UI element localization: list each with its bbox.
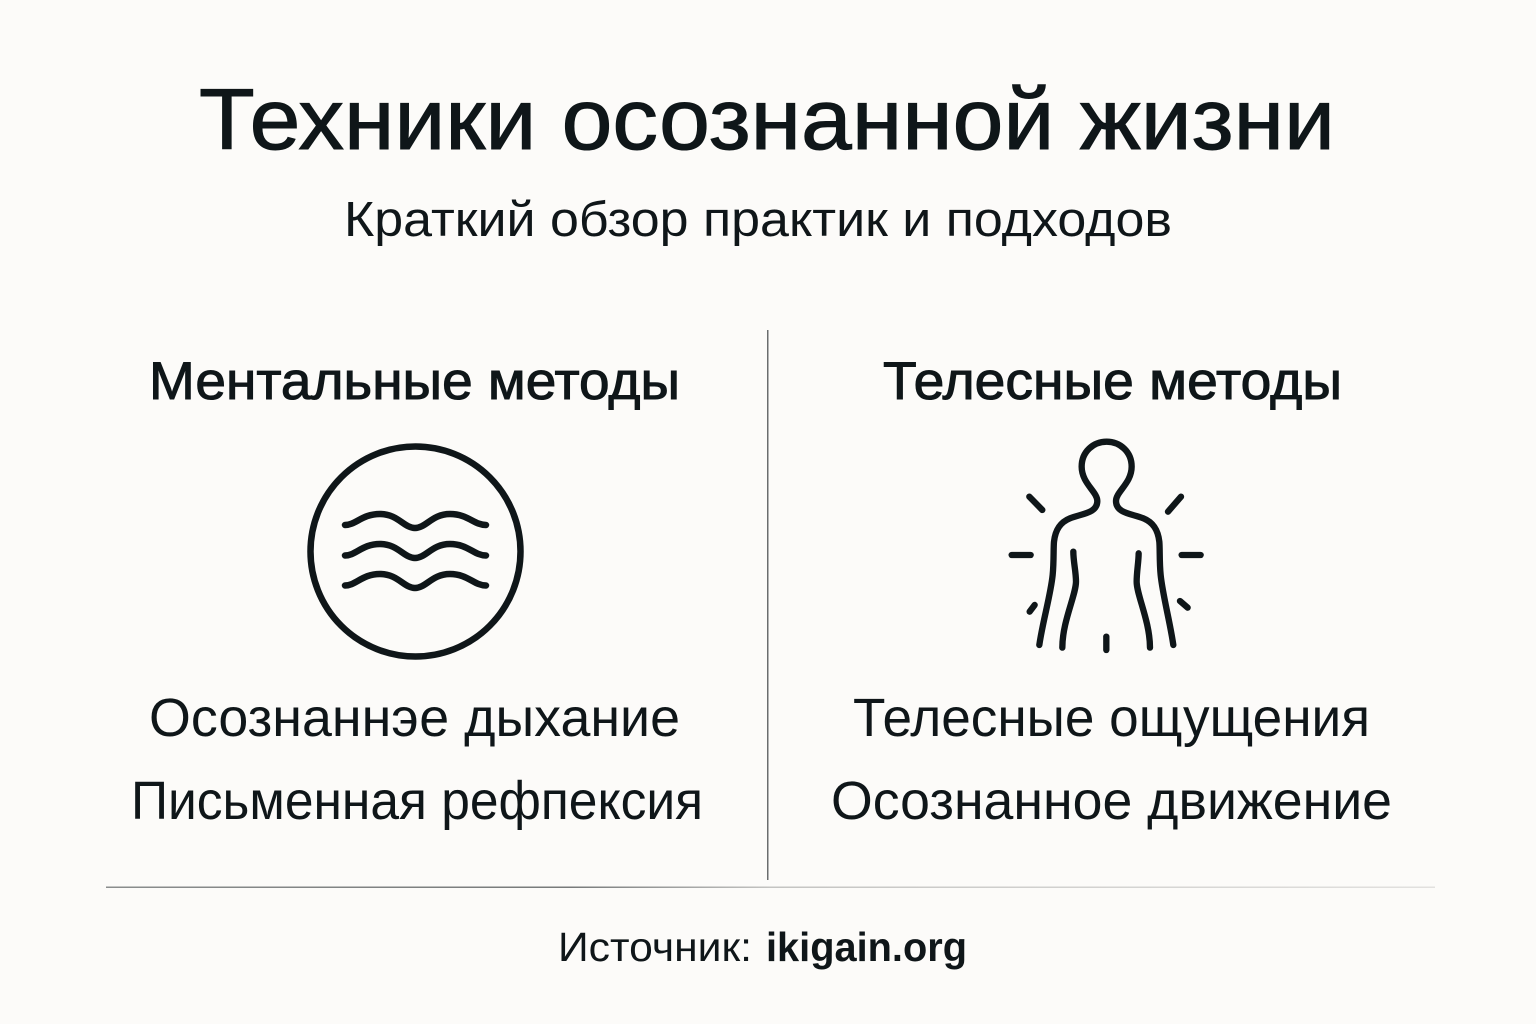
source footer: ikigain.org	[766, 924, 967, 970]
list item: written reflection: Письменная рефпексия	[131, 771, 703, 831]
icon: waves in circle	[310, 446, 520, 656]
vertical divider	[767, 330, 768, 880]
subtitle: Краткий обзор практик и подходов	[344, 193, 1172, 247]
heading: body methods: Телесные методы	[883, 352, 1342, 411]
list item: body sensations: Телесные ощущения	[853, 688, 1370, 748]
source footer: Источник:	[558, 924, 752, 970]
list item: conscious movement: Осознанное движение	[831, 771, 1392, 831]
icon: human body with rays	[1012, 442, 1201, 650]
heading: mental methods: Ментальные методы	[149, 352, 680, 411]
source footer	[558, 924, 967, 970]
horizontal rule	[106, 886, 1435, 888]
panel: body methods	[831, 352, 1392, 831]
title: Техники осознанной жизни	[199, 72, 1335, 168]
panel: mental methods	[131, 352, 703, 831]
list item: conscious breathing: Осознаннэе дыхание	[149, 688, 680, 748]
